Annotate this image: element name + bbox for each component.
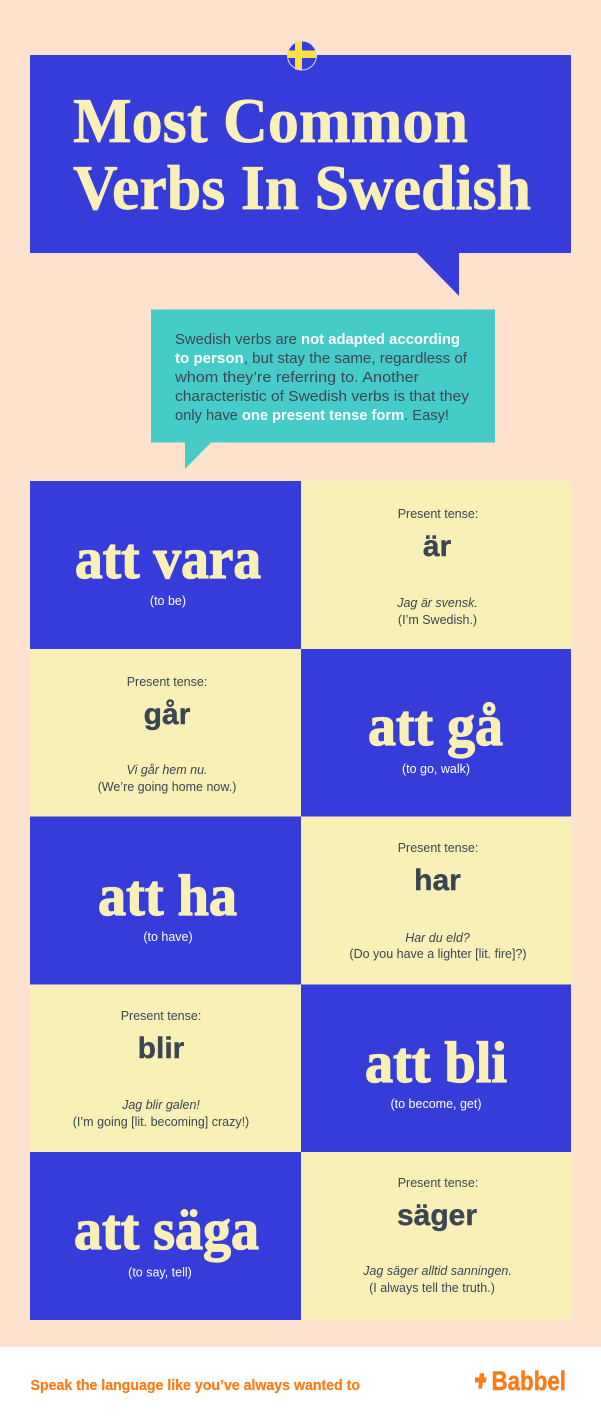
conjugation card: blir [30, 984, 301, 1152]
conjugation card: är: Jag är svensk. [396, 596, 478, 610]
verb card: att säga [30, 1152, 301, 1320]
verb card: att ha: (to have) [143, 930, 193, 944]
footer [0, 1347, 601, 1416]
logo: Babbel [475, 1366, 566, 1396]
verb card: att gå: att gå [368, 693, 503, 758]
intro text: whom they’re referring to. Another [174, 370, 419, 386]
conjugation card: har [301, 816, 571, 984]
intro text: only have one present tense form. Easy! [175, 408, 449, 424]
conjugation card: går: Present tense: [127, 675, 207, 689]
verb card: att vara: att vara [75, 526, 261, 591]
conjugation card: går: (We’re going home now.) [98, 780, 236, 794]
conjugation card: blir: (I’m going [lit. becoming] crazy!) [73, 1115, 249, 1129]
conjugation card: blir: Present tense: [121, 1009, 201, 1023]
conjugation card: är: Present tense: [398, 507, 478, 521]
logo: Babbel: Babbel [492, 1366, 566, 1396]
conjugation card: har: har [414, 864, 461, 897]
verb card: att bli: att bli [365, 1030, 507, 1095]
verb card: att säga: att säga [74, 1197, 259, 1262]
intro text [174, 332, 470, 424]
title speech bubble [30, 41, 571, 296]
tagline: Speak the language like you’ve always wanted to [30, 1378, 360, 1394]
conjugation card: säger [301, 1152, 571, 1320]
conjugation card: blir: blir [138, 1032, 185, 1065]
intro text: to person, but stay the same, regardless of [175, 351, 468, 367]
verb card: att ha: att ha [98, 863, 237, 928]
title: Verbs In Swedish [73, 152, 531, 223]
intro text: Swedish verbs are not adapted according [175, 332, 460, 348]
verb grid [30, 481, 571, 1320]
conjugation card: går [30, 649, 301, 816]
verb card: att vara [30, 481, 301, 649]
conjugation card: har: Har du eld? [405, 931, 470, 945]
conjugation card: säger: Jag säger alltid sanningen. [362, 1264, 512, 1278]
conjugation card: säger: (I always tell the truth.) [369, 1281, 495, 1295]
verb card: att gå [301, 649, 571, 816]
conjugation card: är: är [423, 530, 452, 563]
conjugation card: säger: Present tense: [398, 1176, 478, 1190]
conjugation card: är [301, 481, 571, 649]
intro speech bubble [151, 310, 495, 469]
verb card: att bli: (to become, get) [390, 1097, 482, 1111]
verb card: att vara: (to be) [150, 594, 186, 608]
conjugation card: är: (I’m Swedish.) [398, 613, 477, 627]
conjugation card: går: Vi går hem nu. [126, 763, 208, 777]
conjugation card: blir: Jag blir galen! [121, 1098, 200, 1112]
conjugation card: har: (Do you have a lighter [lit. fire]?) [349, 947, 527, 961]
intro text: characteristic of Swedish verbs is that they [175, 389, 470, 405]
conjugation card: har: Present tense: [398, 841, 478, 855]
verb card: att säga: (to say, tell) [128, 1266, 192, 1280]
conjugation card: säger: säger [397, 1199, 477, 1232]
icon: Swedish flag [288, 41, 316, 70]
conjugation card: går: går [144, 698, 191, 731]
title: Most Common [73, 85, 468, 156]
verb card: att ha [30, 816, 301, 984]
title [73, 85, 531, 223]
verb card: att gå: (to go, walk) [402, 762, 470, 776]
verb card: att bli [301, 984, 571, 1152]
